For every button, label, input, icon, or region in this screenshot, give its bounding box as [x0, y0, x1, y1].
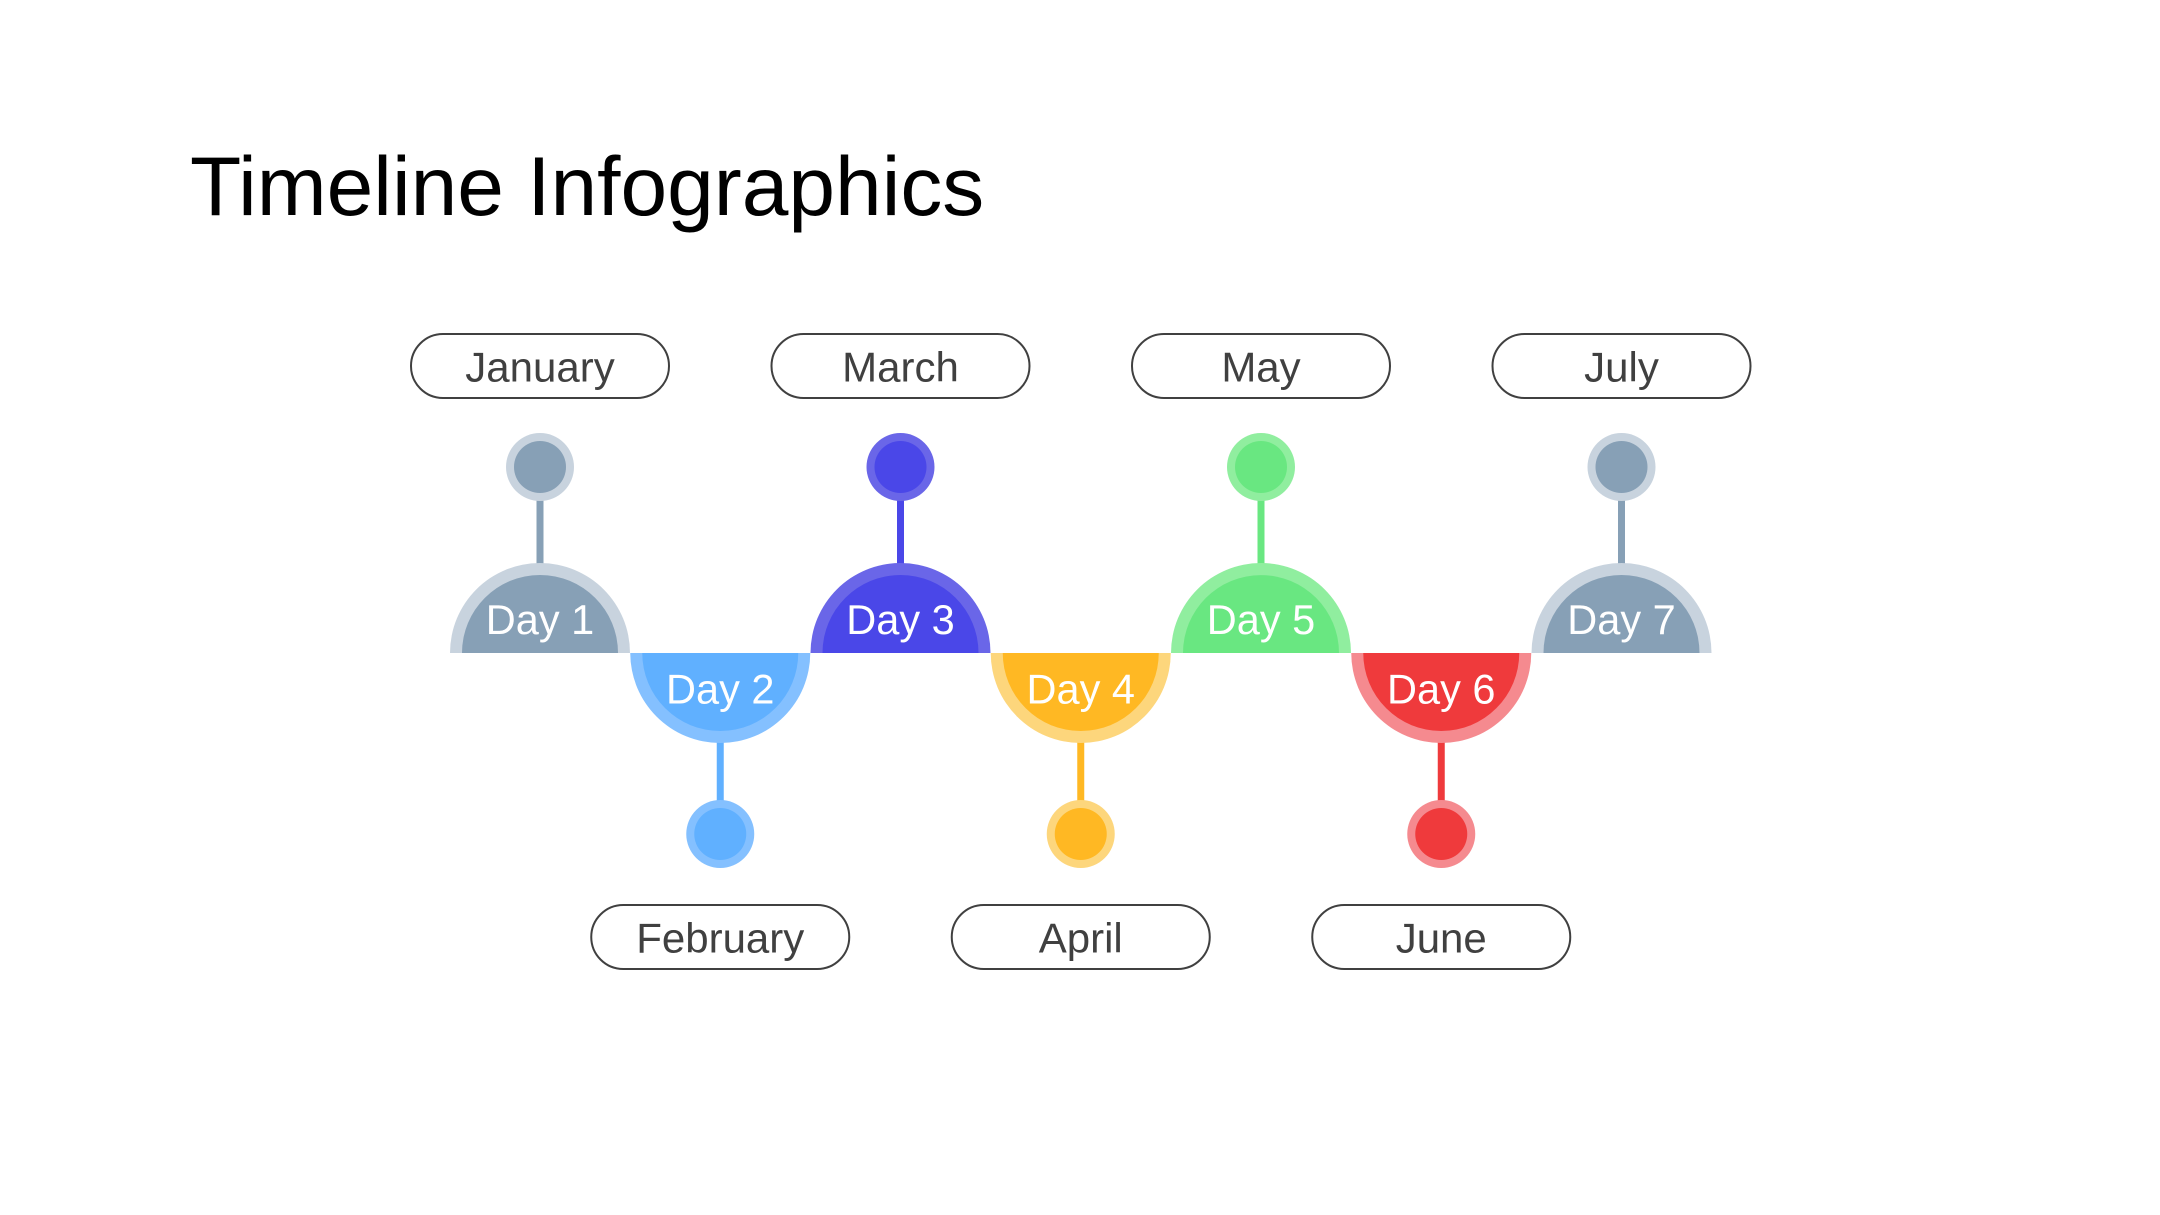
step 3: March: Day 3: [846, 596, 955, 643]
step 2: February: February: [636, 914, 804, 962]
step 7: July: July: [1584, 344, 1659, 390]
step 1: January: Day 1: [486, 596, 594, 643]
step 3: March: March: [842, 344, 959, 390]
timeline: [411, 334, 1750, 969]
step 5: May: Day 5: [1207, 596, 1315, 643]
step 7: July: [1492, 334, 1750, 653]
step 5: May: [1132, 334, 1390, 653]
step 4: April: April: [1039, 914, 1123, 962]
step 4: April: Day 4: [1027, 666, 1135, 712]
step 4: April: [952, 653, 1210, 969]
step 7: July: Day 7: [1567, 596, 1676, 643]
step 6: June: June: [1396, 914, 1487, 962]
step 6: June: Day 6: [1387, 666, 1495, 712]
step 1: January: [411, 334, 669, 653]
title: Timeline Infographics: [190, 139, 984, 233]
step 5: May: May: [1221, 344, 1301, 390]
step 3: March: [772, 334, 1030, 653]
step 2: February: Day 2: [666, 666, 774, 712]
step 6: June: [1312, 653, 1570, 969]
step 1: January: January: [465, 344, 615, 390]
step 2: February: [591, 653, 849, 969]
